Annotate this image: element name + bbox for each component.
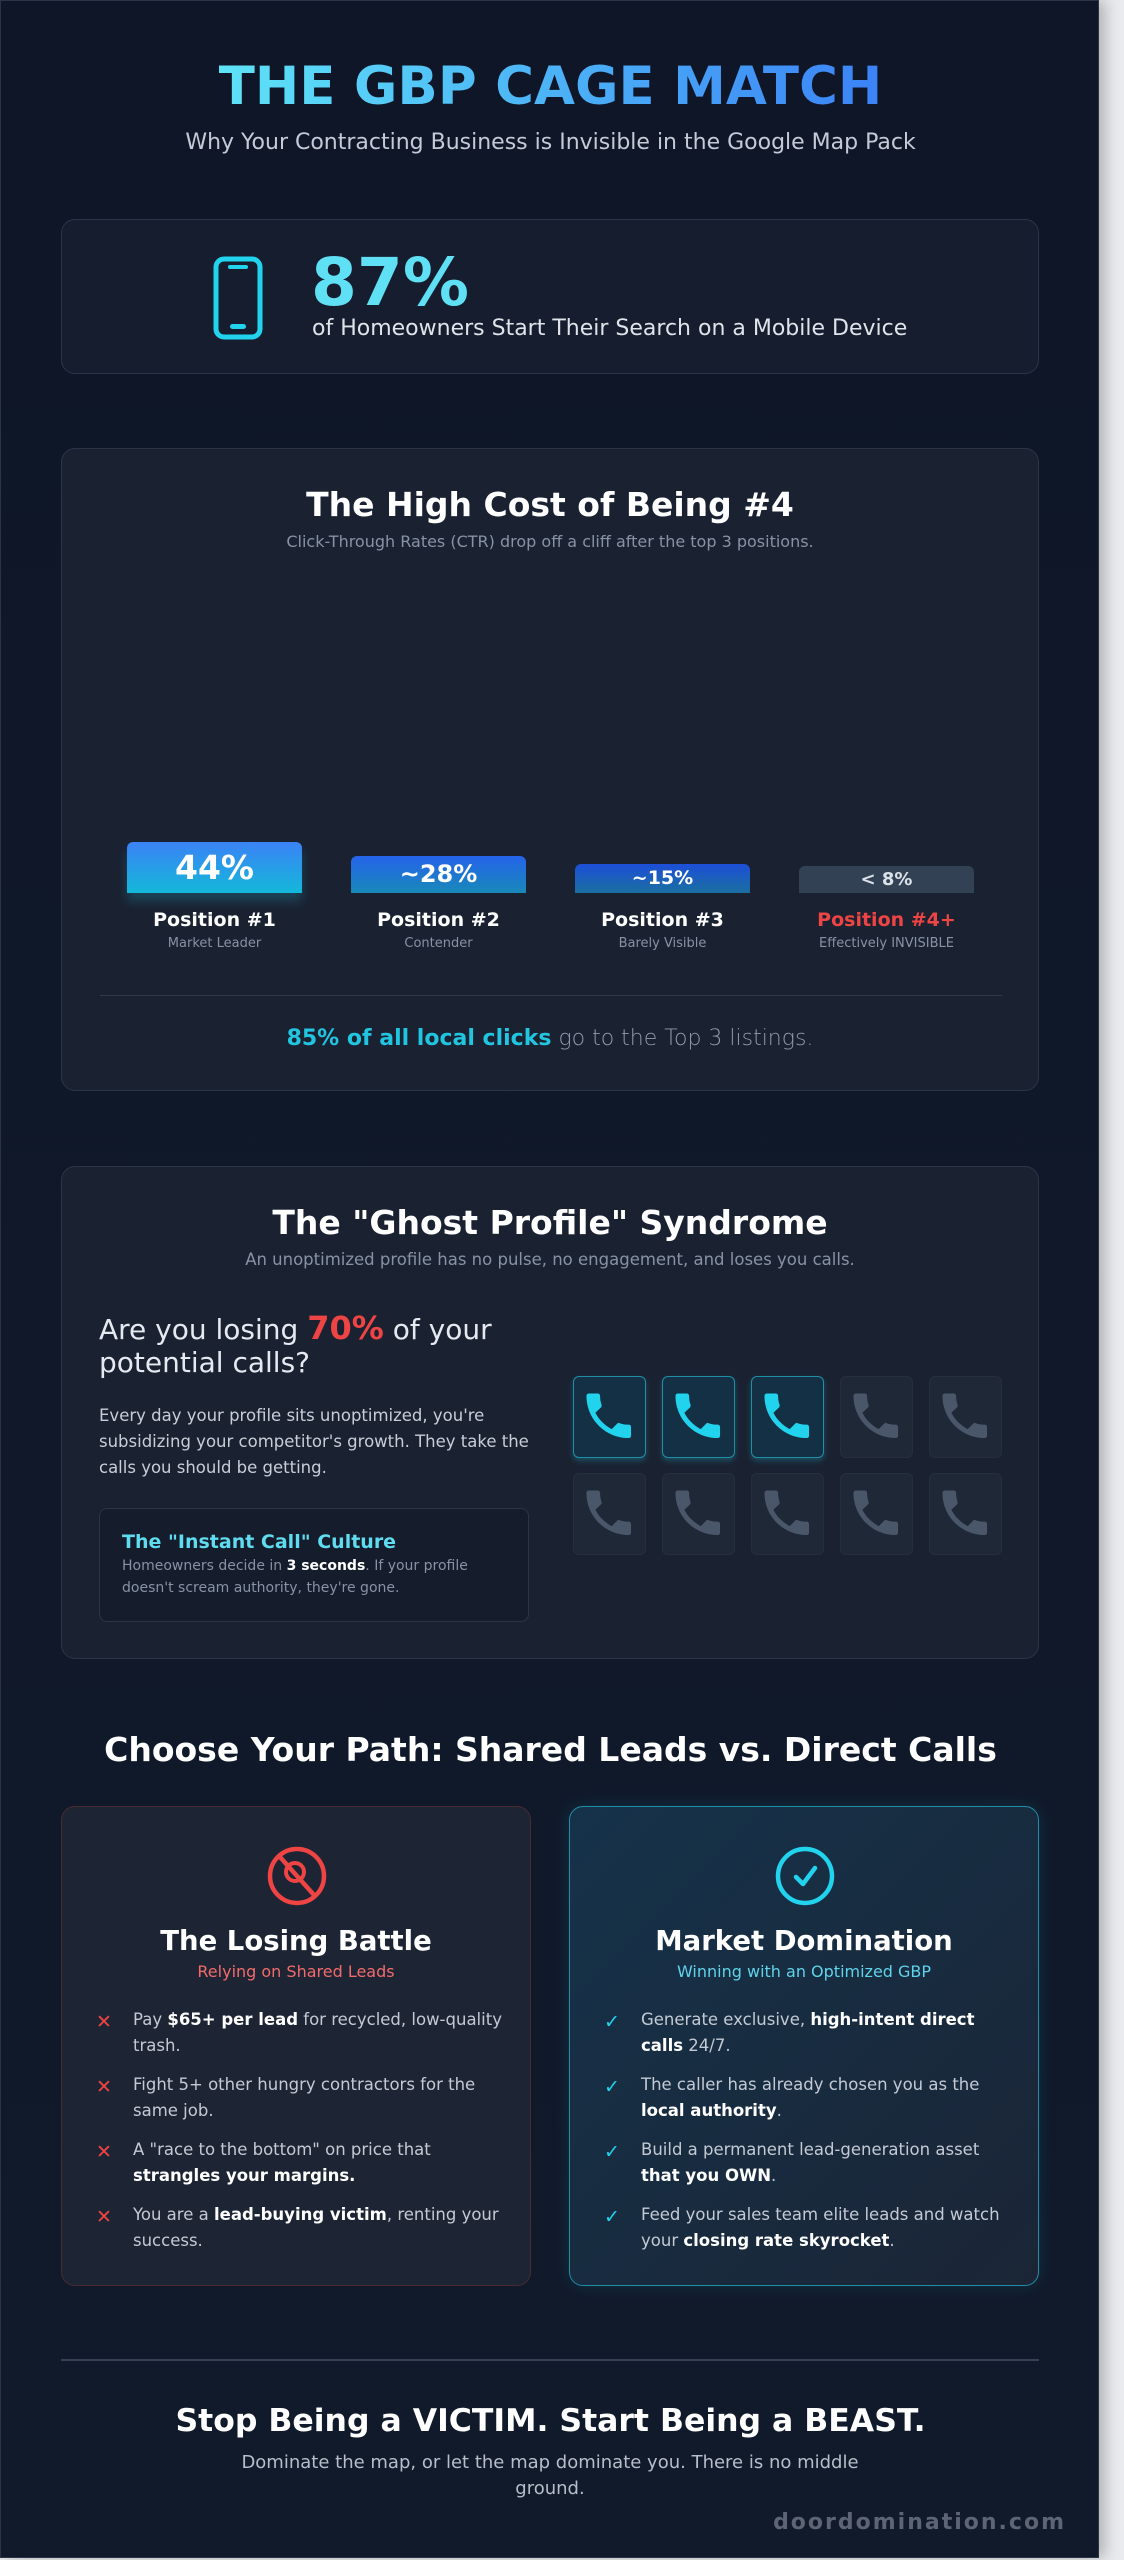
paragraph: Every day your profile sits unoptimized, you're subsidizing your competitor's growth. They take the calls you should be getting.: [99, 1406, 529, 1477]
callout: instant call: [99, 1508, 529, 1622]
bar 3: [575, 864, 750, 893]
list: negatives: [96, 2010, 502, 2250]
list: positives: ✓: [604, 2011, 620, 2033]
panel: ghost profile: [61, 1166, 1039, 1659]
bar 2: [351, 856, 526, 893]
question: Are you losing 70% of your potential calls?: [99, 1309, 492, 1379]
icon: phone: [214, 256, 262, 340]
list: positives: ✓: [604, 2141, 620, 2163]
list: positives: Generate exclusive, high-intent direct calls 24/7.: [641, 2010, 974, 2055]
footer text: Dominate the map, or let the map dominate you. There is no middle ground.: [241, 2452, 859, 2499]
list: negatives: ✕: [96, 2011, 112, 2033]
title: THE GBP CAGE MATCH: [219, 56, 882, 117]
stat text: of Homeowners Start Their Search on a Mobile Device: [312, 316, 907, 341]
list: positives: ✓: [604, 2076, 620, 2098]
label 1: Position #1: [153, 909, 276, 931]
stat number: 87%: [311, 244, 469, 321]
bar 2: ~28%: [400, 860, 477, 888]
subtitle: Why Your Contracting Business is Invisible in the Google Map Pack: [185, 130, 916, 155]
subheading: An unoptimized profile has no pulse, no engagement, and loses you calls.: [245, 1250, 855, 1269]
card title: The Losing Battle: [160, 1925, 432, 1957]
list: negatives: Pay $65+ per lead for recycled, low-quality trash.: [133, 2010, 502, 2055]
card subtitle: Relying on Shared Leads: [197, 1962, 395, 1981]
list: negatives: ✕: [96, 2206, 112, 2228]
label 4: Effectively INVISIBLE: [819, 936, 954, 951]
label 3: Barely Visible: [619, 936, 706, 951]
label 3: [601, 909, 724, 951]
phone grid: [570, 1376, 1002, 1555]
callout: instant call: Homeowners decide in 3 seconds. If your profile doesn't scream authority, they're gone.: [122, 1558, 468, 1596]
section heading: choose your path: Choose Your Path: Shared Leads vs. Direct Calls: [104, 1730, 997, 1769]
list: negatives: A "race to the bottom" on price that strangles your margins.: [133, 2140, 431, 2185]
panel: CTR chart: [61, 448, 1039, 1091]
list: positives: Build a permanent lead-generation asset that you OWN.: [641, 2140, 979, 2185]
card: losing battle: [61, 1806, 531, 2286]
takeaway: 85% of all local clicks go to the Top 3 listings.: [287, 1026, 813, 1051]
bar 3: ~15%: [632, 867, 693, 889]
list: positives: Feed your sales team elite leads and watch your closing rate skyrocket.: [641, 2205, 1000, 2250]
list: negatives: You are a lead-buying victim, renting your success.: [133, 2205, 499, 2250]
label 1: Market Leader: [168, 936, 261, 951]
list: positives: [604, 2010, 1000, 2250]
card subtitle: Winning with an Optimized GBP: [677, 1962, 931, 1981]
icon: check circle: [776, 1846, 834, 1906]
bar 4: < 8%: [861, 869, 912, 890]
list: negatives: Fight 5+ other hungry contractors for the same job.: [133, 2075, 475, 2120]
label 4: Position #4+: [817, 909, 956, 931]
bar chart: [124, 842, 974, 904]
card: market domination: [569, 1806, 1039, 2286]
heading: The High Cost of Being #4: [306, 485, 794, 524]
list: positives: The caller has already chosen you as the local authority.: [641, 2075, 979, 2120]
icon: no sign: [268, 1846, 326, 1906]
list: negatives: ✕: [96, 2141, 112, 2163]
brand: doordomination.com: [773, 2510, 1066, 2535]
list: negatives: ✕: [96, 2076, 112, 2098]
label 1: [153, 909, 276, 951]
label 2: Position #2: [377, 909, 500, 931]
bar 1: [127, 842, 302, 893]
label 4: [817, 909, 956, 951]
chart subtitle: Click-Through Rates (CTR) drop off a cliff after the top 3 positions.: [286, 532, 814, 551]
callout: instant call: The "Instant Call" Culture: [122, 1531, 396, 1553]
panel: mobile stat: [61, 219, 1039, 374]
bar 1: 44%: [175, 848, 254, 887]
heading: The "Ghost Profile" Syndrome: [272, 1203, 828, 1242]
list: positives: ✓: [604, 2206, 620, 2228]
footer headline: Stop Being a VICTIM. Start Being a BEAST.: [175, 2403, 926, 2439]
label 3: Position #3: [601, 909, 724, 931]
bar 4: [799, 866, 974, 893]
label 2: Contender: [404, 936, 473, 951]
label 2: [377, 909, 500, 951]
card title: Market Domination: [655, 1925, 953, 1957]
